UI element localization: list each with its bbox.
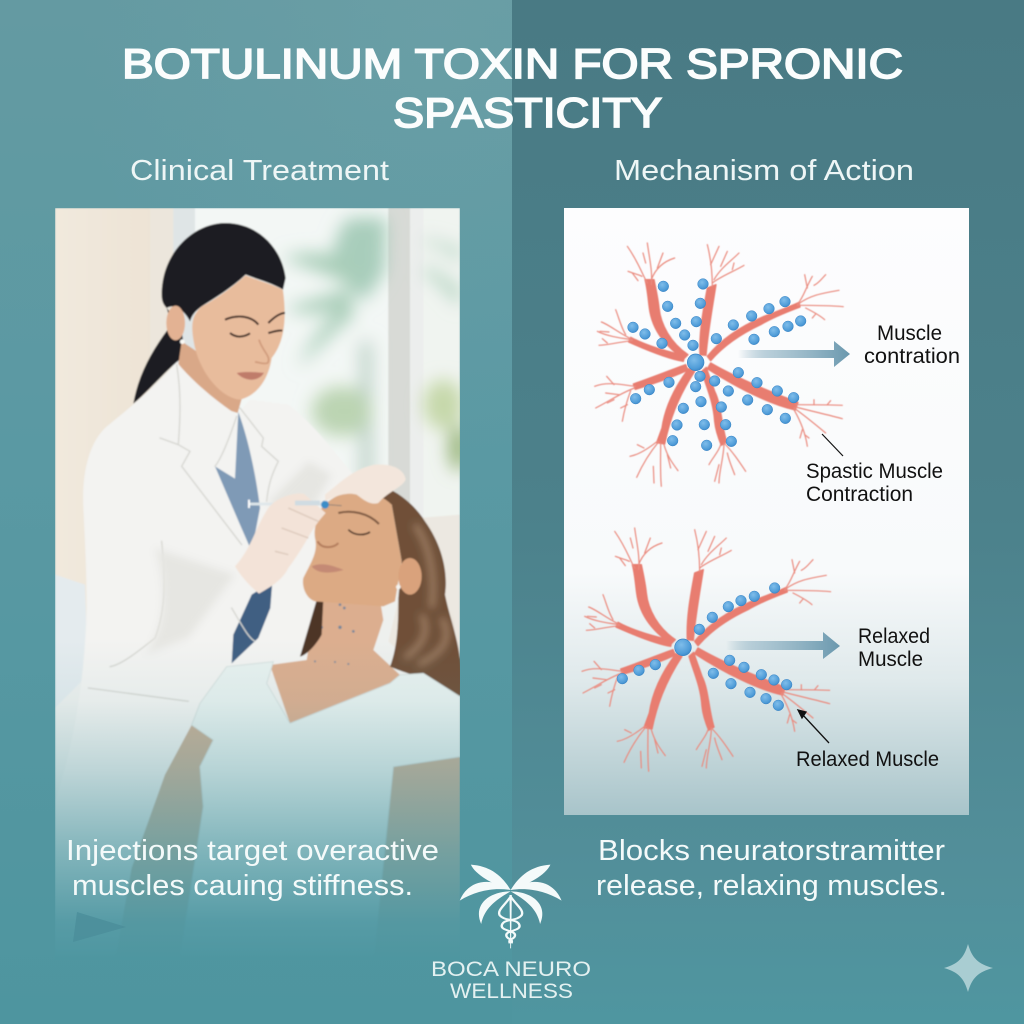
caption: clinical: muscles cauing stiffness.: [72, 870, 413, 902]
logo wordmark: BOCA NEURO: [431, 958, 591, 981]
label: spastic muscle contraction: Contraction: [806, 483, 913, 506]
photo bottom fade: [55, 640, 460, 960]
background left half: [0, 0, 512, 1024]
leader arrow: relaxed: [798, 710, 829, 743]
photo: hair highlights: [405, 525, 446, 665]
photo: blurred palm tree: [283, 209, 460, 480]
diagram panel background: [564, 208, 969, 815]
photo: left glove and syringe: [235, 493, 342, 594]
caption: mechanism: release, relaxing muscles.: [596, 870, 947, 902]
photo: coat folds and lapels: [88, 365, 278, 701]
photo: patient shirt: [192, 661, 460, 910]
photo: right glove: [325, 464, 406, 504]
photo: patient face: [303, 491, 422, 606]
panel: mechanism of action diagram: [564, 208, 969, 815]
arrow: relaxed muscle: [726, 632, 840, 659]
title: SPASTICITY: [393, 89, 662, 136]
photo: patient arms: [126, 725, 460, 910]
background right half: [512, 0, 1024, 1024]
background glow: [0, 0, 512, 620]
heading: clinical treatment: Clinical Treatment: [130, 155, 389, 187]
label: spastic muscle contraction: Spastic Muscle: [806, 460, 943, 483]
label: relaxed muscle bottom: Relaxed Muscle: [796, 748, 939, 771]
neuron diagram: spastic: [595, 243, 843, 486]
photo: pillar and window: [150, 208, 410, 503]
label: relaxed muscle right: Relaxed: [858, 625, 930, 648]
photo: scrubs: [215, 412, 260, 551]
photo: neck pen marks: [314, 603, 355, 665]
label: muscle contration: Muscle: [877, 322, 942, 345]
title: BOTULINUM TOXIN FOR SPRONIC: [122, 40, 903, 87]
logo wordmark: WELLNESS: [450, 980, 573, 1003]
photo: doctor face: [166, 275, 285, 400]
photo: equipment: [55, 575, 88, 708]
caption: mechanism: Blocks neuratorstramitter: [598, 835, 945, 867]
faint triangle: [73, 912, 126, 942]
photo: patient neck and chest: [270, 600, 400, 723]
photo: room floor base: [55, 219, 424, 801]
photo: room wall: [55, 208, 150, 641]
label: muscle contration: contration: [864, 345, 960, 368]
neuron diagram: relaxed: [582, 528, 831, 771]
photo: patient hair: [300, 482, 461, 698]
heading: mechanism of action: Mechanism of Action: [614, 155, 914, 187]
leader line: spastic: [822, 434, 843, 456]
arrow: muscle contraction: [738, 341, 850, 367]
photo: chair: [389, 515, 460, 652]
photo: coat shading: [152, 464, 328, 649]
photo: lower scrubs: [232, 581, 272, 663]
logo: palm and caduceus: [460, 865, 562, 948]
icon: sparkle star: [944, 944, 993, 992]
caption: clinical: Injections target overactive: [66, 835, 439, 867]
label: relaxed muscle right: Muscle: [858, 648, 923, 671]
photo: doctor coat: [82, 362, 322, 680]
photo: doctor neck: [178, 341, 243, 413]
panel: clinical treatment photo: [55, 208, 468, 960]
photo: doctor ponytail and hair: [133, 223, 286, 404]
